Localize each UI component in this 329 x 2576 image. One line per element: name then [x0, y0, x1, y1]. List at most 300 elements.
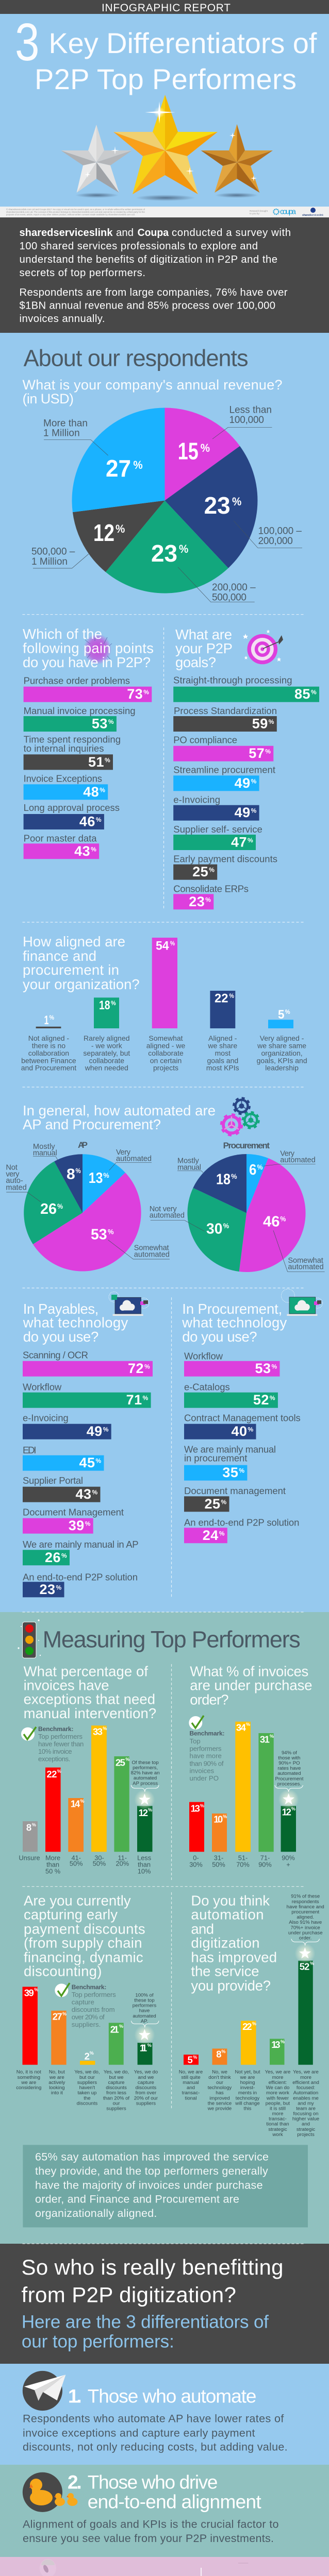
question heading: What is your company's annual revenue? — [23, 377, 283, 393]
question heading: How aligned are — [23, 934, 125, 950]
callout: 82% automated AP: AP process — [133, 1781, 158, 1786]
column: 31-50% 10%: 31- — [214, 1854, 223, 1862]
question heading: manual intervention? — [24, 1705, 156, 1721]
column: more efficient and focused 52% — [292, 1961, 319, 2138]
question heading: invoices have — [24, 1677, 109, 1693]
column: less than 20% of suppliers 21%: suppliers — [106, 2106, 126, 2111]
column: 30-50% 33%: 33 — [93, 1726, 103, 1737]
benchmark note: exceptions. — [38, 1755, 70, 1762]
column: 0-30% 13%: 30% — [189, 1860, 203, 1868]
bar: Supplier self-service 47%: Supplier self- service — [173, 824, 262, 835]
column: technology has not improved 8%: 8 — [216, 2048, 221, 2059]
pie chart: 12 — [93, 519, 114, 546]
bar: Consolidate ERPs 23% — [173, 884, 249, 909]
panel: differentiator 1 — [23, 2371, 288, 2453]
column: 11-20% 25%: 11- — [118, 1854, 127, 1862]
bar: Process Standardization 59%: 59 — [252, 716, 268, 732]
column: 41-50% 14%: 50% — [70, 1860, 83, 1868]
bar: Document Management 39% — [23, 1507, 124, 1534]
column: more efficient and focused 52%: and my — [298, 2100, 314, 2106]
intro text: $1BN annual revenue and 85% process over 100,000 — [20, 300, 275, 311]
intro text: understand the benefits of digitization in P2P and the — [20, 254, 277, 265]
panel: invoices under purchase order chart — [189, 1663, 312, 1868]
callout: 91% aligned — [287, 1893, 324, 1964]
body text: invoice exceptions and capture early payment — [23, 2427, 255, 2439]
pie label: 200,000 to 500,000: 200,000 – — [212, 582, 256, 593]
question heading: automation — [191, 1907, 264, 1923]
callout: 91% aligned: 91% of these — [291, 1893, 320, 1899]
question heading: the service — [191, 1963, 259, 1979]
panel: differentiator 2 — [23, 2472, 279, 2545]
question heading: discounting) — [24, 1963, 102, 1979]
heading: 1. — [68, 2385, 82, 2406]
column: over 20% of suppliers 11%: and we — [138, 2075, 154, 2080]
label: somewhat automated: automated — [134, 1250, 170, 1259]
column: more efficient and focused 52%: and — [302, 2122, 310, 2127]
bar: Time spent responding 51%: 51 — [88, 754, 104, 770]
pie label: less than 100,000 — [212, 405, 272, 439]
column: still manual 5% — [179, 2054, 203, 2101]
pie label: less than 100,000: Less than — [229, 405, 272, 416]
column: suppliers not taken up 2%: Yes, we do, — [74, 2070, 100, 2075]
column: more efficient and focused 52%: projects — [297, 2132, 315, 2138]
column: more efficient and focused 52%: more — [300, 2075, 311, 2080]
question heading: (from supply chain — [24, 1935, 142, 1951]
question heading: What are — [175, 626, 232, 642]
column: 0-30% 13%: % — [200, 1803, 204, 1808]
bar: Document management 25%: 25 — [204, 1496, 220, 1512]
column: aligned 22%: most — [215, 1049, 231, 1057]
question heading: do you use? — [23, 1329, 98, 1345]
bar: Process Standardization 59% — [173, 705, 277, 732]
column: aligned 22%: we share — [207, 1041, 237, 1049]
column: more efficient 13%: more work — [266, 2090, 289, 2096]
bar: Document Management 39%: Document Management — [23, 1507, 124, 1518]
bar: Purchase order problems 73%: Purchase order problems — [24, 675, 130, 686]
benchmark note: invoices — [190, 1767, 215, 1775]
panel: pain points — [23, 626, 154, 859]
bar: Straight-through processing 85% — [173, 675, 319, 702]
header label: INFOGRAPHIC REPORT — [102, 2, 231, 14]
column: somewhat aligned 54%: % — [170, 940, 175, 947]
bar: e-Invoicing 49%: % — [251, 807, 257, 815]
column: somewhat aligned 54% — [146, 938, 185, 1072]
question heading: (in USD) — [23, 391, 74, 406]
column: more efficient 13%: work — [272, 2132, 283, 2138]
copyright note: purpose of an event, article, report or any other written product, without written consent made available by sharedserviceslink.com Ltd. — [6, 213, 135, 216]
question heading: goals? — [175, 654, 216, 670]
bar: We are mainly manual in AP 26%: % — [61, 1552, 67, 1559]
column: rarely aligned 18%: collaborate — [89, 1056, 124, 1064]
chart: Procurement automation pie: % — [257, 1163, 263, 1171]
bar: Document Management 39%: % — [85, 1520, 91, 1528]
bar: An end-to-end P2P solution 23%: An end-to-end P2P solution — [23, 1571, 138, 1582]
column: still manual 5%: No, we are — [179, 2070, 203, 2075]
column: somewhat aligned 54%: on certain — [150, 1056, 182, 1064]
intro text: and — [116, 227, 134, 239]
bar: Document Management 39%: 39 — [69, 1518, 84, 1533]
bar: Workflow 53% — [184, 1350, 279, 1377]
bar: Workflow 53%: 53 — [255, 1361, 271, 1376]
benchmark note: Top performers — [72, 1991, 116, 1998]
column: 30-50% 33%: % — [103, 1726, 107, 1731]
pie label: less than 100,000: 100,000 — [229, 415, 264, 426]
question heading: has improved — [191, 1949, 277, 1965]
column: more efficient 13%: transac- — [269, 2116, 287, 2122]
bar: Scanning / OCR 72%: 72 — [128, 1361, 143, 1376]
question heading: do you use? — [182, 1329, 257, 1345]
bar: An end-to-end P2P solution 24% — [184, 1517, 299, 1543]
question heading — [23, 1103, 216, 1132]
question heading: In Procurement, — [182, 1301, 282, 1317]
bar: EDI 45%: EDI — [23, 1445, 36, 1455]
column: over 20% of suppliers 11%: capture — [138, 2080, 154, 2086]
column: 71-90% 31%: 31 — [260, 1734, 270, 1745]
question heading: you provide? — [191, 1977, 271, 1993]
bar: Streamline procurement 49%: Streamline procurement — [173, 765, 275, 775]
callout: 94% automated procurement: rates have — [277, 1766, 301, 1771]
column: more efficient 13%: % — [281, 2039, 285, 2044]
intro text: sharedserviceslink — [20, 227, 113, 239]
column: hoping investments will change this 22%: 22 — [242, 2021, 252, 2032]
bar: Document management 25%: Document management — [184, 1485, 286, 1496]
callout: 100% automated AP: 100% of — [135, 1993, 154, 1998]
bar: Workflow 71%: Workflow — [23, 1381, 62, 1392]
column: suppliers not taken up 2%: suppliers — [77, 2080, 97, 2086]
column: 41-50% 14%: 14 — [71, 1798, 80, 1809]
label: somewhat automated: automated — [288, 1263, 324, 1272]
bar: EDI 45%: 45 — [79, 1455, 95, 1470]
bar: Time spent responding 51%: % — [105, 756, 110, 764]
chart: AP automation pie: 26 — [40, 1201, 57, 1217]
icon: silver star — [61, 125, 132, 193]
pie chart — [72, 408, 257, 593]
bar: Consolidate ERPs 23%: 23 — [189, 894, 205, 909]
column: less than 20% of suppliers 21%: than 20% of — [103, 2095, 129, 2101]
column: 41-50% 14%: 41- — [71, 1854, 81, 1862]
heading: Those who automate — [88, 2385, 256, 2406]
benchmark note: Benchmark: — [38, 1725, 73, 1733]
pie label: more than 1 million: 1 Million — [43, 428, 80, 439]
label: not very automated: auto- — [6, 1177, 23, 1185]
icon: gears — [221, 1098, 259, 1135]
column: more efficient 13%: efficient: — [269, 2080, 287, 2086]
question heading: In Payables, — [23, 1301, 98, 1317]
label: not very automated — [150, 1205, 205, 1231]
bar: An end-to-end P2P solution 23%: 23 — [39, 1582, 55, 1597]
column: aligned 22% — [206, 991, 239, 1072]
column: more efficient and focused 52%: focusing on — [293, 2111, 319, 2117]
column: less than 10% 12% — [137, 1806, 153, 1875]
benchmark note: under PO — [190, 1774, 219, 1782]
bar: Workflow 53%: % — [271, 1363, 277, 1370]
column: less than 10% 12%: Less — [137, 1854, 151, 1862]
column: more efficient 13% — [265, 2039, 290, 2138]
column: technology has not improved 8%: our — [216, 2080, 224, 2086]
column: rarely aligned 18%: when needed — [85, 1064, 128, 1072]
benchmark note — [189, 1716, 225, 1782]
column: suppliers not taken up 2%: % — [90, 2050, 94, 2056]
question heading: Which of the — [23, 626, 102, 642]
icon: traffic light — [18, 1619, 41, 1658]
cloud — [120, 1300, 135, 1311]
bar: e-Invoicing 49%: e-Invoicing — [173, 794, 220, 805]
label: very automated: Very — [280, 1149, 295, 1158]
column: not aligned 1%: collaboration — [28, 1049, 69, 1057]
column: 51-70% 34%: 70% — [236, 1860, 250, 1868]
column: more than 50% 22% — [45, 1768, 61, 1875]
benchmark note: 10% invoice — [38, 1748, 72, 1755]
column: 11-20% 25% — [114, 1756, 129, 1868]
column: very aligned 5%: % — [285, 1008, 290, 1015]
panel: P2P goals — [173, 626, 319, 909]
column: suppliers not taken up 2%: taken up — [77, 2090, 96, 2096]
bar: Poor master data 43%: % — [91, 845, 96, 853]
bar: e-Catalogs 52%: % — [270, 1395, 275, 1402]
column: less than 10% 12%: than — [138, 1860, 151, 1868]
bar: e-Invoicing 49%: 49 — [235, 805, 250, 820]
bar: Manual invoice processing 53%: % — [108, 718, 114, 725]
column: 31-50% 10%: 50% — [212, 1860, 225, 1868]
column: more efficient 13%: We can do — [266, 2085, 289, 2091]
column: not aligned 1%: there is no — [32, 1041, 65, 1049]
bar: Supplier Portal 43%: % — [92, 1489, 98, 1496]
bar: Manual invoice processing 53% — [24, 705, 135, 732]
pie label: 100,000 to 200,000: 100,000 – — [258, 526, 302, 537]
column: technology has not improved 8%: we provide — [207, 2106, 232, 2111]
body text — [23, 2518, 279, 2545]
callout: 82% automated AP: automated — [134, 1775, 157, 1781]
benchmark note: capture — [72, 1998, 94, 2006]
column: very aligned 5%: goals, KPIs and — [257, 1056, 307, 1064]
column: aligned 22%: 22 — [215, 992, 228, 1006]
icon: laptop with cloud, procurement — [281, 1289, 322, 1316]
column: more than 50% 22%: 22 — [46, 1769, 57, 1780]
column: over 20% of suppliers 11% — [134, 2043, 158, 2106]
bar: Purchase order problems 73%: 73 — [127, 686, 143, 702]
question heading: Do you think — [191, 1892, 270, 1908]
bar: Invoice Exceptions 48%: % — [100, 786, 105, 793]
question heading: order? — [190, 1691, 229, 1707]
chart: Procurement automation pie: 18 — [216, 1171, 231, 1188]
column: somewhat aligned 54%: aligned - we — [146, 1041, 185, 1049]
icon: pain glow — [84, 634, 112, 665]
bar: Early payment discounts 25%: % — [209, 867, 215, 874]
column: hoping investments will change this 22%: ments in — [238, 2090, 257, 2096]
chart: AP automation pie: 8 — [67, 1166, 75, 1182]
callout box: 65% say automation: they provide, and the top performers generally — [35, 2165, 268, 2177]
panel: procurement technology — [182, 1289, 322, 1543]
title: Key Differentiators of — [48, 27, 317, 59]
label: not very automated: Not — [6, 1164, 18, 1172]
pie chart: % — [179, 543, 188, 555]
column: looking into it 27%: looking — [49, 2085, 65, 2091]
bar: Long approval process 46%: 46 — [79, 814, 95, 829]
bar: e-Invoicing 49% — [23, 1412, 111, 1439]
column: 31-50% 10%: 10 — [213, 1814, 223, 1825]
column: suppliers not taken up 2% — [74, 2050, 100, 2106]
column: very aligned 5%: we share same — [257, 1041, 306, 1049]
question heading — [190, 1663, 312, 1707]
column: still manual 5%: still quite — [181, 2075, 201, 2080]
callout: 91% aligned: have finance and — [287, 1904, 324, 1910]
benchmark note: Top performers — [38, 1733, 83, 1740]
column: more efficient and focused 52%: efficient and — [292, 2080, 319, 2086]
column: over 20% of suppliers 11%: from over — [136, 2090, 157, 2096]
column: rarely aligned 18% — [83, 997, 130, 1072]
column: less than 10% 12%: 10% — [138, 1868, 151, 1875]
callout: 82% automated AP: performers, — [133, 1765, 158, 1771]
column: not considering 39%: we are — [21, 2080, 36, 2086]
question heading: payment discounts — [24, 1921, 145, 1937]
callout: 82% automated AP — [131, 1760, 160, 1810]
panel: differentiator 3, corrupted — [30, 2559, 270, 2576]
copyright note — [6, 208, 145, 216]
label: very automated — [109, 1148, 152, 1171]
column: 30-50% 33%: 50% — [93, 1860, 106, 1868]
bar: Scanning / OCR 72%: Scanning / OCR — [23, 1350, 88, 1361]
callout: 94% automated procurement — [275, 1750, 304, 1810]
column: aligned 22%: most KPIs — [206, 1064, 239, 1072]
bar: Early payment discounts 25%: 25 — [192, 864, 208, 879]
callout: 94% automated procurement: processes. — [277, 1781, 301, 1787]
pie label: 500,000 to 1 million: 500,000 – — [31, 547, 75, 557]
benchmark note — [55, 1983, 116, 2028]
callout: 100% automated AP: performers — [133, 2003, 156, 2009]
panel: invoice exceptions chart — [19, 1663, 160, 1875]
heading: Those who drive — [88, 2472, 218, 2493]
callout: 91% aligned: under purchase — [288, 1930, 323, 1936]
column: rarely aligned 18%: 18 — [99, 998, 110, 1012]
column: technology has not improved 8%: technology — [208, 2085, 232, 2091]
column: more efficient 13%: 13 — [271, 2039, 281, 2050]
label: somewhat automated: Somewhat — [288, 1257, 323, 1265]
body text: Respondents who automate AP have lower rates of — [23, 2413, 284, 2425]
panel: early payment discounts chart — [16, 1892, 159, 2111]
pie chart: % — [116, 522, 125, 535]
chart: AP automation pie: % — [103, 1171, 109, 1179]
benchmark note: Benchmark: — [72, 1984, 106, 1991]
column: 11-20% 25%: % — [125, 1757, 129, 1762]
benchmark note: Top — [190, 1737, 201, 1745]
column: suppliers not taken up 2%: discounts — [77, 2100, 97, 2106]
column: over 20% of suppliers 11%: 20% of our — [134, 2095, 158, 2101]
column: not aligned 1% — [21, 1013, 76, 1072]
column: more efficient and focused 52%: % — [310, 1961, 314, 1966]
question heading — [182, 1301, 287, 1345]
bar: Poor master data 43%: Poor master data — [24, 833, 97, 843]
column: more than 50% 22%: 50 % — [45, 1868, 60, 1875]
column: more efficient and focused 52%: higher value — [292, 2116, 319, 2122]
bar: PO compliance 57%: PO compliance — [173, 734, 237, 745]
bar: Straight-through processing 85%: Straight-through processing — [173, 675, 292, 686]
label: not very automated: automated — [150, 1212, 185, 1220]
column: 0-30% 13%: 13 — [191, 1803, 200, 1814]
bar: Supplier self-service 47%: 47 — [231, 835, 246, 850]
column: 0-30% 13%: 0- — [193, 1854, 199, 1862]
column: less than 20% of suppliers 21%: discounts — [106, 2085, 127, 2091]
sponsor note: Research brought — [250, 210, 268, 212]
body text: ensure you see value from your P2P investments. — [23, 2532, 274, 2545]
title: 3 — [15, 12, 39, 72]
column: not considering 39% — [16, 1987, 41, 2091]
column: more efficient and focused 52%: 52 — [300, 1961, 309, 1972]
bar: e-Invoicing 49% — [173, 794, 259, 821]
question heading — [23, 377, 283, 406]
callout: 94% automated procurement: those with — [278, 1755, 301, 1761]
bar: Streamline procurement 49%: 49 — [235, 775, 250, 791]
bar: We are mainly manual in AP 26%: We are mainly manual in AP — [23, 1539, 139, 1550]
callout: 94% automated procurement: automated — [277, 1771, 301, 1776]
column: technology has not improved 8%: the service — [208, 2100, 232, 2106]
icon: gold star — [113, 95, 218, 194]
label: mostly manual: manual — [33, 1149, 57, 1158]
callout: 100% automated AP: AP. — [141, 2019, 148, 2024]
chart: Procurement automation pie: % — [223, 1222, 229, 1230]
column: more efficient and focused 52%: Automation — [293, 2090, 318, 2096]
bar: Supplier Portal 43%: 43 — [75, 1486, 91, 1502]
chart: Procurement automation pie: 30 — [206, 1221, 222, 1237]
column: not considering 39%: something — [18, 2075, 40, 2080]
icon: faded pin — [40, 2559, 56, 2576]
column: 90%+ 12%: + — [286, 1860, 290, 1868]
column: 30-50% 33% — [91, 1725, 107, 1868]
column: hoping investments will change this 22%: technology — [236, 2095, 259, 2101]
benchmark note: have more — [190, 1752, 222, 1760]
chart: Procurement automation pie: Procurement — [223, 1141, 270, 1150]
question heading — [24, 1663, 156, 1721]
bar: We are mainly manual in procurement 35%: 35 — [222, 1465, 238, 1480]
heading: so who is really benefitting — [22, 2255, 284, 2307]
bar: Time spent responding 51%: to internal inquiries — [24, 743, 104, 754]
callout: 94% automated procurement: 94% of — [282, 1750, 297, 1756]
callout: 91% aligned: Also 91% have — [289, 1920, 322, 1925]
label: somewhat automated: Somewhat — [134, 1244, 169, 1252]
column: hoping investments will change this 22%: we are — [240, 2075, 255, 2080]
bar: e-Invoicing 49%: e-Invoicing — [23, 1412, 69, 1423]
question heading: procurement in — [23, 962, 119, 978]
pie chart: 23 — [151, 540, 177, 567]
column: hoping investments will change this 22%: % — [252, 2021, 256, 2026]
label: very automated — [264, 1149, 316, 1166]
label: very automated: Very — [116, 1148, 131, 1157]
column: less than 20% of suppliers 21%: % — [119, 2024, 123, 2029]
column: more efficient and focused 52%: team are — [296, 2106, 316, 2111]
label: not very automated: very — [6, 1170, 20, 1178]
question heading: Are you currently — [24, 1892, 131, 1908]
subheading: the 3 differentiators: our top performers: — [22, 2332, 174, 2352]
intro text: 100 shared services professionals to explore and — [20, 241, 258, 252]
column: technology has not improved 8%: % — [221, 2049, 225, 2054]
column: looking into it 27% — [48, 2011, 67, 2096]
column: less than 20% of suppliers 21%: capture — [108, 2080, 125, 2086]
question heading: what technology — [23, 1315, 128, 1331]
callout box: 65% say automation: order, and Finance and Procurement are — [35, 2193, 239, 2206]
question heading: In general, how automated are — [23, 1103, 216, 1118]
column: 0-30% 13% — [189, 1802, 204, 1868]
column: 90%+ 12%: 90% — [282, 1854, 295, 1862]
bar: Invoice Exceptions 48%: Invoice Exceptions — [24, 773, 102, 784]
column: hoping investments will change this 22%: Not yet, but — [235, 2070, 260, 2075]
column: less than 20% of suppliers 21%: 21 — [110, 2024, 119, 2035]
benchmark note: suppliers. — [72, 2021, 101, 2028]
question heading: exceptions that need — [24, 1691, 155, 1707]
bar: Invoice Exceptions 48%: 48 — [83, 784, 99, 800]
label: somewhat automated — [273, 1230, 325, 1272]
intro text: Coupa — [138, 227, 169, 239]
bar: Long approval process 46%: % — [96, 816, 102, 823]
column: looking into it 27%: we are — [49, 2075, 64, 2080]
